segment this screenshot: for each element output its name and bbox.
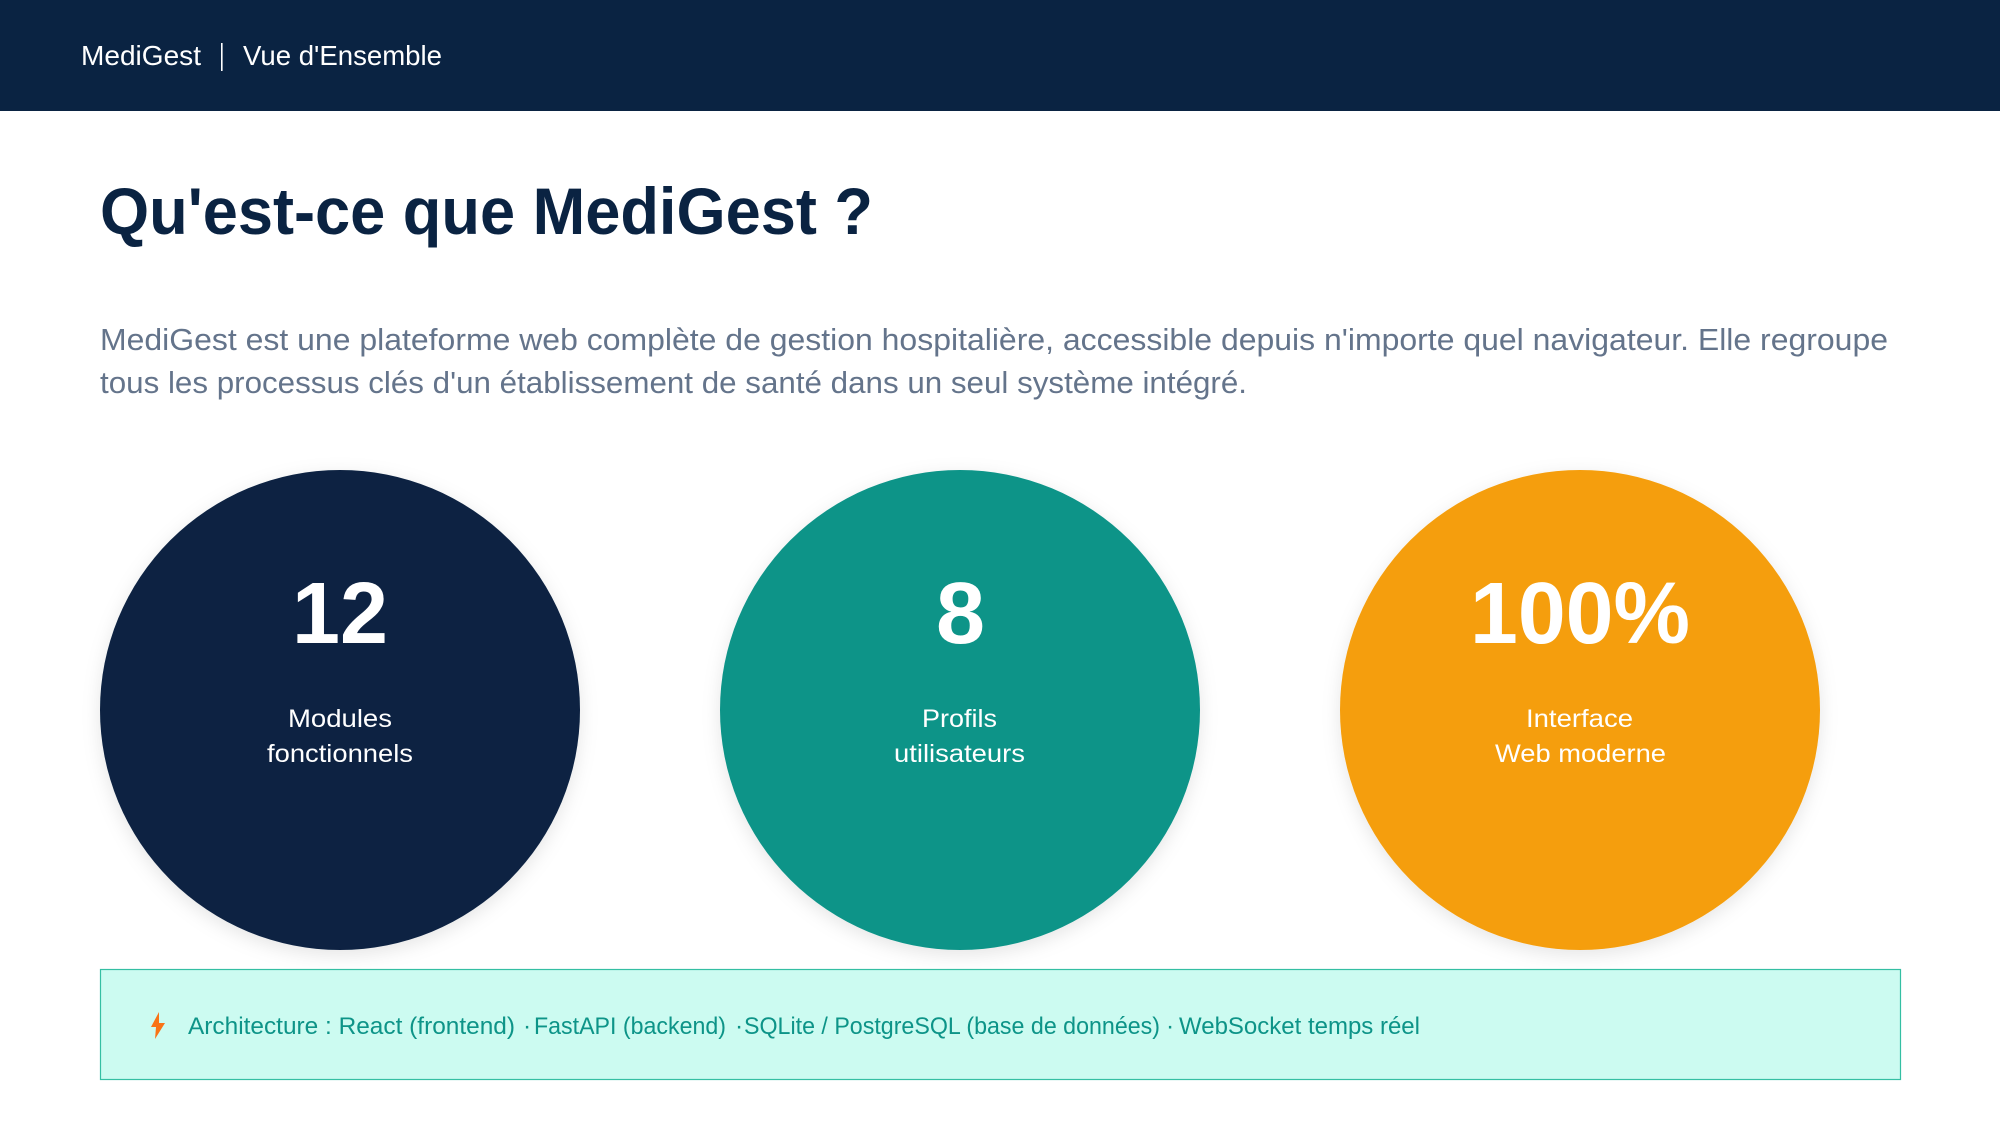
- label: modules: [267, 705, 413, 768]
- stat circle: modules: [100, 470, 580, 950]
- stat circle: modules: 12: [292, 565, 388, 662]
- label: profiles: utilisateurs: [894, 740, 1025, 768]
- title: Qu'est-ce que MediGest ?: [100, 174, 873, 248]
- label: profiles: Profils: [922, 705, 997, 733]
- header text: MediGest: [81, 40, 201, 71]
- architecture text: SQLite / PostgreSQL (base de données): [744, 1013, 1160, 1040]
- stat circle: web interface: 100%: [1470, 565, 1690, 662]
- architecture text: ·: [735, 1013, 743, 1040]
- stat circle: profiles: [720, 470, 1200, 950]
- label: web interface: [1495, 705, 1666, 768]
- architecture text: [188, 1013, 1420, 1040]
- label: web interface: Interface: [1526, 705, 1633, 733]
- intro paragraph: [100, 322, 1888, 400]
- stat circle: profiles: 8: [936, 565, 985, 662]
- label: profiles: [894, 705, 1025, 768]
- header text: [81, 40, 442, 71]
- icon: lightning bolt: [151, 1012, 165, 1039]
- architecture text: FastAPI (backend): [534, 1013, 726, 1040]
- intro paragraph: tous les processus clés d'un établissement de santé dans un seul système intégré.: [100, 365, 1247, 400]
- label: modules: Modules: [288, 705, 392, 733]
- architecture callout: [100, 970, 1900, 1080]
- header text: Vue d'Ensemble: [243, 40, 442, 71]
- architecture text: Architecture : React (frontend): [188, 1013, 515, 1040]
- label: modules: fonctionnels: [267, 740, 413, 768]
- label: web interface: Web moderne: [1495, 740, 1666, 768]
- stat circle: web interface: [1340, 470, 1820, 950]
- architecture text: ·: [523, 1013, 531, 1040]
- header bar: [0, 0, 2000, 111]
- architecture text: ·: [1166, 1013, 1174, 1040]
- architecture text: WebSocket temps réel: [1179, 1013, 1420, 1040]
- intro paragraph: MediGest est une plateforme web complète de gestion hospitalière, accessible depuis n'importe quel navigateur. Elle regroupe: [100, 322, 1888, 357]
